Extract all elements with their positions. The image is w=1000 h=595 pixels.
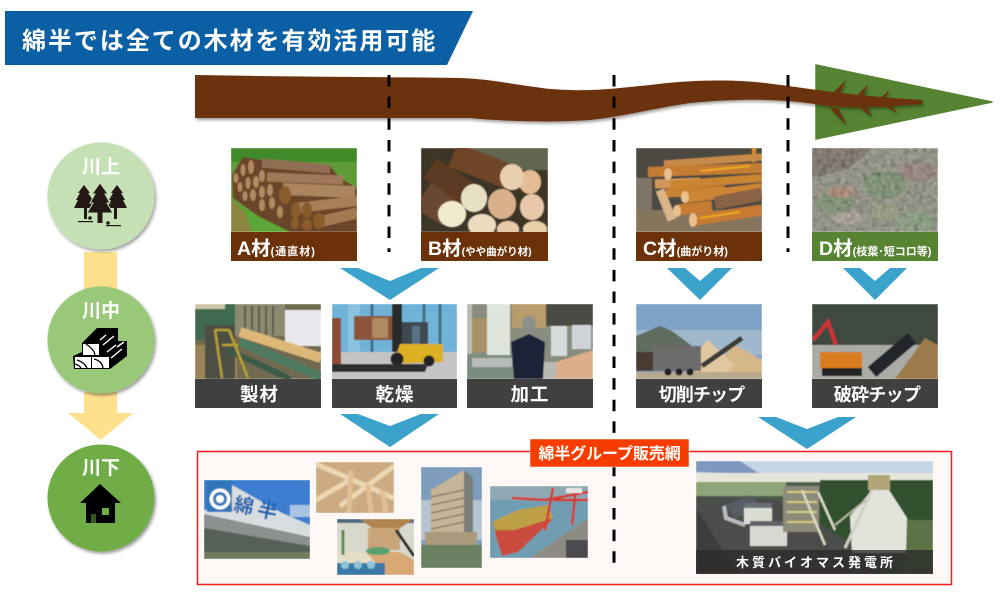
circle: downstream — [48, 444, 154, 552]
photo: biomass plant: 木質バイオマス発電所 — [736, 555, 896, 570]
card: B material: B材(やや曲がり材) — [428, 238, 532, 260]
panel: sales network — [198, 452, 952, 584]
chevron C — [667, 268, 732, 300]
icon: house — [80, 484, 121, 523]
card: processing: 加工 — [510, 384, 550, 405]
card: cut chips — [636, 304, 762, 408]
icon: forest — [74, 183, 127, 226]
title banner — [5, 11, 473, 65]
flow arrow midstream to downstream — [68, 392, 133, 440]
tree trunk log — [195, 75, 922, 125]
card: cut chips: 切削チップ — [659, 385, 745, 405]
circle: downstream: 川下 — [82, 458, 120, 479]
chevron D — [843, 268, 907, 300]
photo: port — [490, 486, 588, 558]
title banner: 綿半では全ての木材を有効活用可能 — [22, 28, 437, 55]
card: A material: A材(通直材) — [237, 238, 316, 260]
card: D material — [812, 148, 938, 261]
chevron to sales network — [340, 414, 439, 447]
photo: tower — [421, 467, 482, 568]
divider line 1 — [388, 75, 390, 252]
card: processing — [467, 304, 593, 408]
card: sawmilling — [195, 304, 321, 408]
circle: upstream — [48, 142, 154, 250]
sales network tag: 綿半グループ販売網 — [538, 444, 681, 463]
card: sawmilling: 製材 — [240, 384, 279, 405]
flow arrow upstream to midstream — [84, 252, 117, 290]
photo: store: 綿半 — [232, 493, 283, 525]
photo: store — [204, 480, 310, 559]
photo: room — [337, 519, 414, 575]
circle: midstream — [48, 286, 154, 394]
card: C material — [636, 148, 762, 261]
card: crushed chips — [812, 304, 938, 408]
card: C material: C材(曲がり材) — [643, 238, 728, 260]
circle: upstream: 川上 — [82, 156, 120, 178]
sales network tag — [530, 439, 689, 467]
green leaf triangle — [816, 65, 992, 139]
card: drying: 乾燥 — [375, 384, 415, 405]
card: B material — [421, 148, 548, 261]
chevron A and B — [340, 268, 439, 300]
card: D material: D材(枝葉･短コロ等) — [819, 238, 932, 260]
card: drying — [332, 304, 457, 408]
divider line 3 — [786, 75, 790, 252]
photo: biomass plant — [696, 461, 933, 574]
chevron to biomass plant — [758, 417, 856, 449]
circle: midstream: 川中 — [82, 300, 120, 322]
card: A material — [231, 148, 357, 261]
icon: lumber — [73, 328, 127, 369]
photo: beams — [316, 462, 394, 513]
card: crushed chips: 破砕チップ — [834, 385, 921, 405]
divider line 2 — [612, 75, 616, 564]
